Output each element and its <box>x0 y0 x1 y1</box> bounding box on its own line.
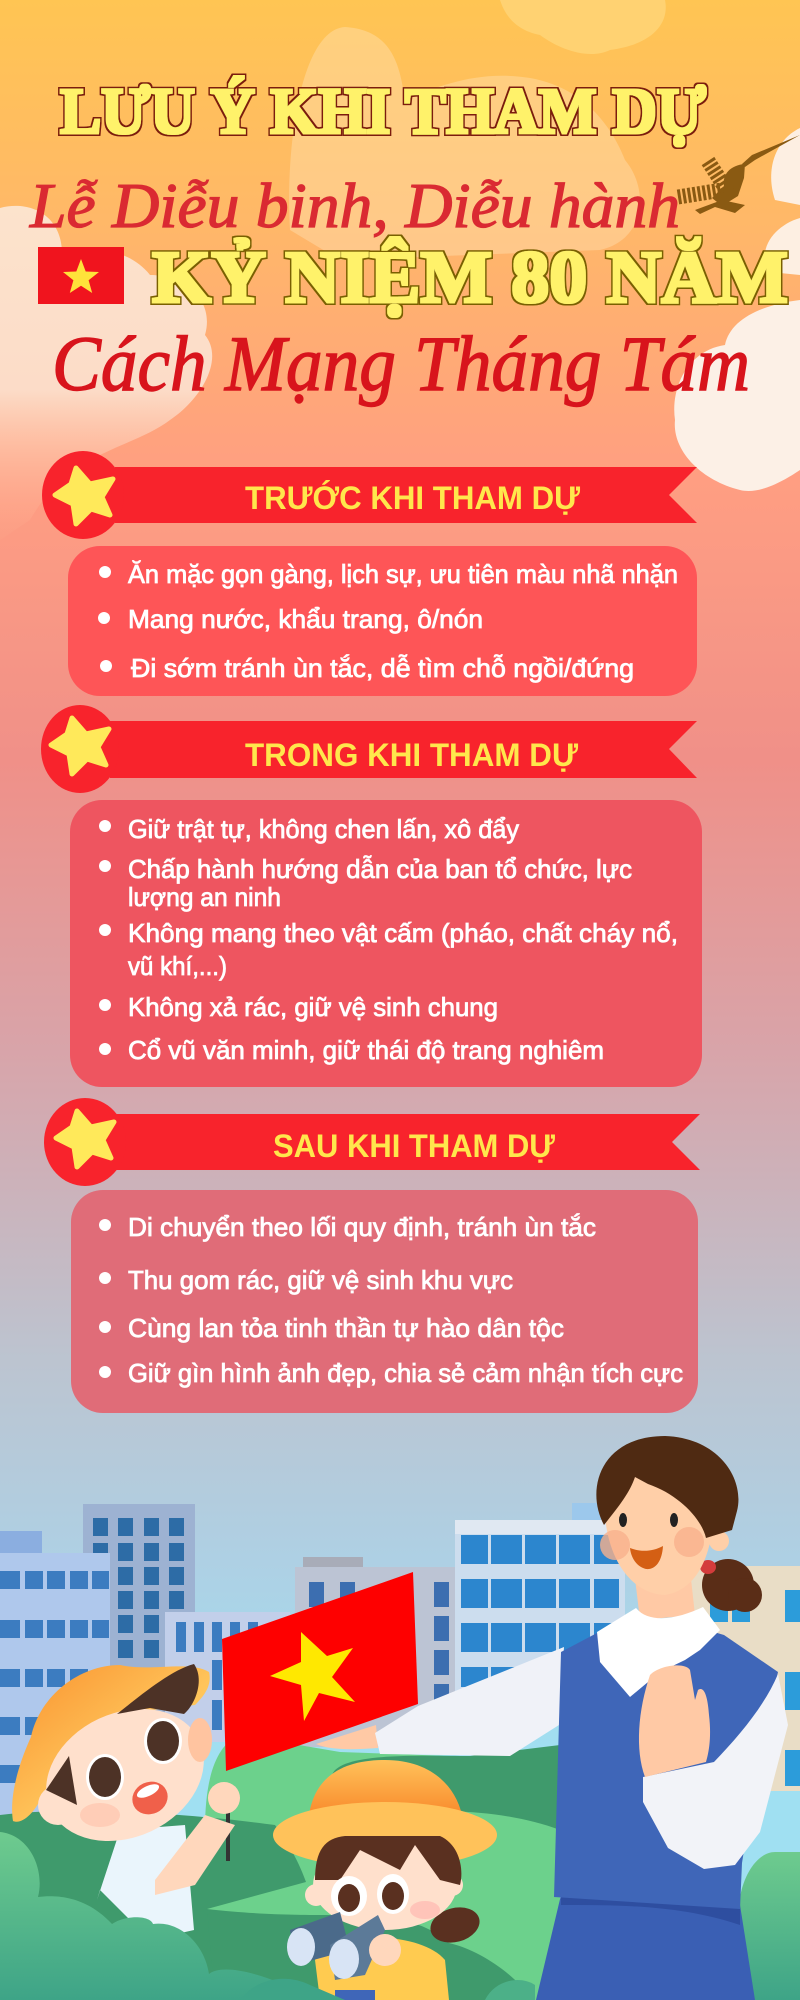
face <box>24 1684 226 1866</box>
binoculars <box>287 1912 385 1980</box>
neck and collar <box>634 1570 695 1620</box>
raised arm <box>155 1815 235 1895</box>
right arm sleeve <box>643 1674 788 1869</box>
hand <box>369 1934 401 1966</box>
hair <box>596 1436 738 1538</box>
hair <box>315 1836 461 1885</box>
eyes <box>86 1754 124 1800</box>
panel: after attending <box>71 1190 698 1413</box>
section header: before <box>42 451 697 539</box>
building: light blue left <box>0 1553 110 1823</box>
hand holding flag <box>316 1725 378 1749</box>
panel: after attending: Di chuyển theo lối quy định, tránh ùn tắc <box>128 1212 596 1242</box>
panel: during attending: Chấp hành hướng dẫn của ban tổ chức, lực <box>128 854 632 884</box>
panel: during attending <box>70 800 702 1087</box>
building: beige right <box>690 1566 800 1791</box>
foreground bushes <box>0 1832 535 2000</box>
pigtail <box>426 1902 484 1948</box>
panel: after attending: Cùng lan tỏa tinh thần tự hào dân tộc <box>128 1313 564 1343</box>
raised hand <box>639 1665 710 1777</box>
panel: before attending: Đi sớm tránh ùn tắc, dễ tìm chỗ ngồi/đứng <box>131 653 634 683</box>
decorative clouds <box>0 0 800 540</box>
panel: during attending: Giữ trật tự, không chen lấn, xô đẩy <box>128 814 519 844</box>
vest <box>554 1625 778 1909</box>
green hills <box>0 1735 800 2000</box>
mouth <box>127 1776 173 1820</box>
heading: during: TRONG KHI THAM DỰ <box>245 737 578 773</box>
panel: after attending: Thu gom rác, giữ vệ sinh khu vực <box>128 1265 513 1295</box>
section header: during <box>41 705 697 793</box>
icon: star <box>51 718 109 774</box>
skirt <box>536 1895 755 2000</box>
shirt <box>315 1938 449 2000</box>
icon: large Vietnam flag <box>222 1572 418 1861</box>
panel: during attending: Không mang theo vật cấm (pháo, chất cháy nổ, <box>128 918 678 948</box>
character: woman <box>316 1436 788 2000</box>
hair bun <box>700 1559 762 1612</box>
hat brim <box>273 1802 497 1868</box>
left arm sleeve <box>375 1647 564 1756</box>
panel: during attending: vũ khí,...) <box>128 951 227 981</box>
heading: after: SAU KHI THAM DỰ <box>273 1128 555 1164</box>
character: girl <box>273 1760 497 2000</box>
eyes <box>331 1876 367 1916</box>
building: grey block <box>295 1557 460 1747</box>
city buildings <box>0 1503 800 1823</box>
heading: before: TRƯỚC KHI THAM DỰ <box>245 480 580 516</box>
panel: before attending: Mang nước, khẩu trang, ô/nón <box>128 604 483 634</box>
panel: during attending: lượng an ninh <box>128 882 281 912</box>
building: glass office <box>455 1503 625 1705</box>
face <box>313 1840 457 1930</box>
title line 3: KỶ NIỆM 80 NĂM <box>152 237 788 319</box>
building: grey-blue tower <box>83 1504 195 1764</box>
shirt <box>97 1825 194 1940</box>
title line 1: LƯU Ý KHI THAM DỰ <box>60 75 706 148</box>
building: far left back <box>0 1531 42 1571</box>
character: boy <box>12 1664 240 1940</box>
icon: Vietnam flag in title <box>38 247 124 304</box>
panel: before attending: Ăn mặc gọn gàng, lịch sự, ưu tiên màu nhã nhặn <box>128 559 678 589</box>
title line 2 script: Lễ Diễu binh, Diễu hành <box>29 170 680 241</box>
hat crown <box>309 1760 462 1815</box>
face <box>600 1470 729 1595</box>
icon: star <box>56 1111 114 1167</box>
hat <box>12 1665 210 1822</box>
panel: after attending: Giữ gìn hình ảnh đẹp, chia sẻ cảm nhận tích cực <box>128 1358 683 1388</box>
icon: golden Lac bird <box>678 135 800 214</box>
panel: during attending: Không xả rác, giữ vệ sinh chung <box>128 992 498 1022</box>
panel: before attending <box>68 546 697 696</box>
panel: during attending: Cổ vũ văn minh, giữ thái độ trang nghiêm <box>128 1035 604 1065</box>
icon: star <box>55 468 113 524</box>
hair <box>117 1664 199 1714</box>
section header: after <box>44 1098 700 1186</box>
title line 4 script: Cách Mạng Tháng Tám <box>52 320 750 407</box>
building: lilac low block <box>165 1612 290 1742</box>
